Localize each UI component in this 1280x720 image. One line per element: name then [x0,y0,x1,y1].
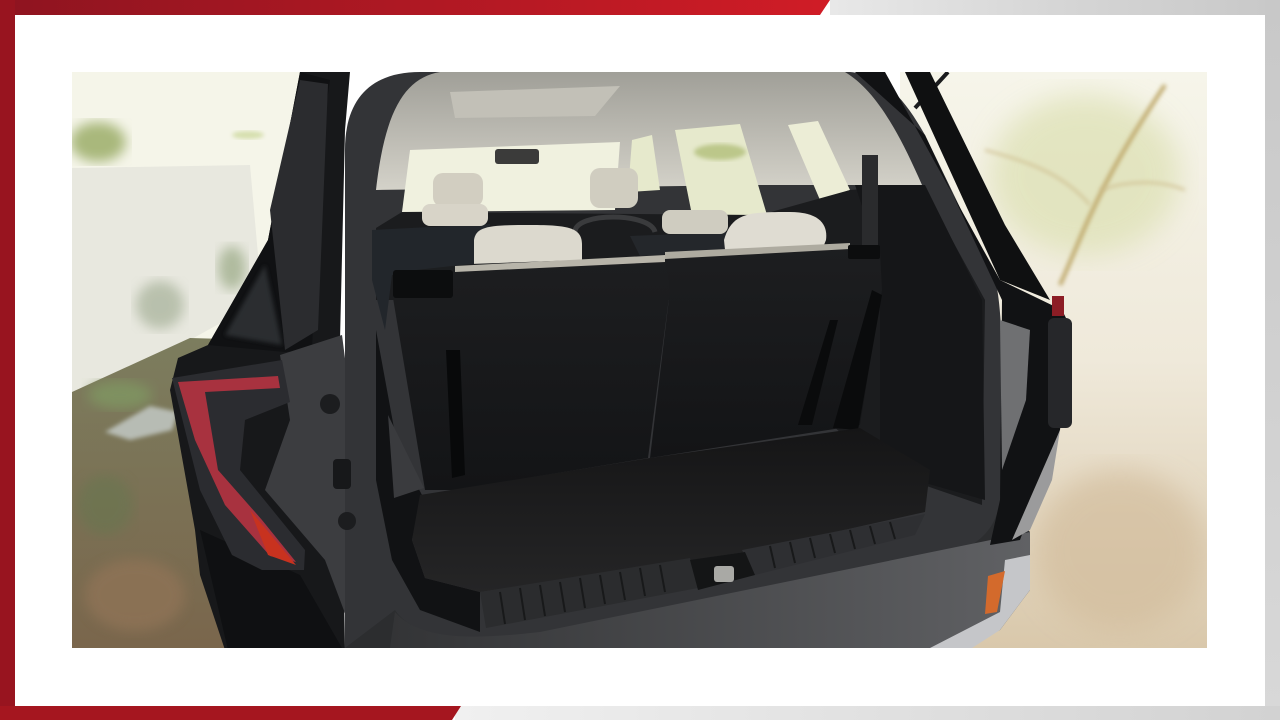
background: left wall and garden [70,72,312,648]
car: left body and tailgate pillar [170,72,350,648]
car: interior roof lining [376,72,922,190]
car: rear bumper [390,532,1030,648]
windows [402,121,850,215]
car: boot opening rim [345,72,1003,648]
headrests: front and middle row [422,168,728,234]
sunroof [450,86,620,118]
photo: open SUV boot [70,72,1207,650]
boot: sill scuff plates [480,522,896,628]
interior: dark cabin and side panel [372,155,985,505]
seat: third row backrests [393,243,882,490]
seat: third row headrests [474,212,826,268]
boot: carpeted floor [412,428,930,592]
icon: left tail lamp [172,360,305,570]
car: rear base fill [345,500,1030,648]
background: right garden [900,72,1207,648]
car: right door jamb and tailgate edge [855,72,1072,545]
car: left latch details [320,394,356,530]
boot: left well and side trim [376,330,480,632]
